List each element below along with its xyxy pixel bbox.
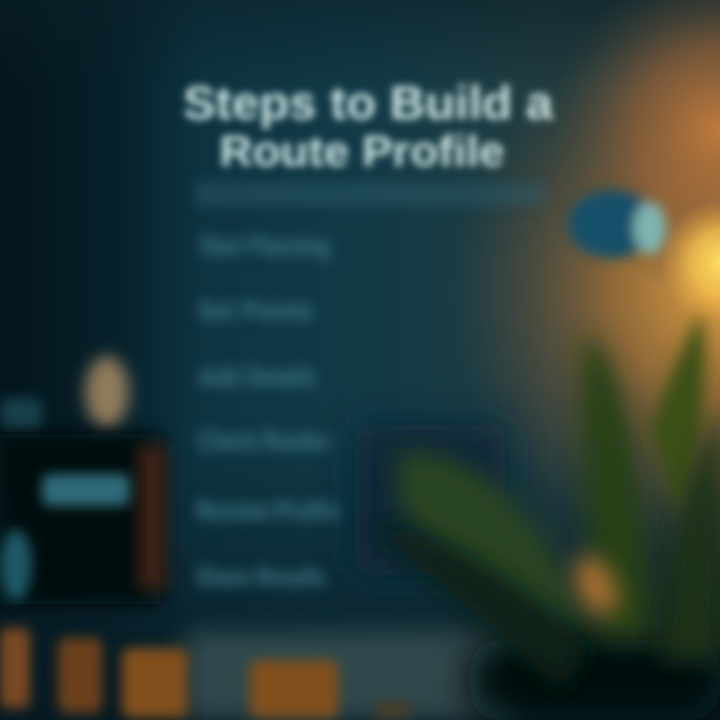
list text block: Review Profile [196,495,341,526]
round wall icon [568,190,666,258]
title: Steps to Build a [183,76,554,129]
list text block: Start Planning [200,230,330,261]
warm highlight [566,549,626,623]
bottom row of brown bottles [0,628,411,718]
title [183,76,554,176]
warm light glow [400,0,720,600]
left shelf with candle and jar [0,356,166,604]
list text block: Add Details [198,361,316,392]
upper left object [0,398,42,428]
dark panel behind plant [355,425,505,575]
list text block [195,182,545,592]
dark jar [0,434,160,604]
candle flame [85,356,129,428]
plant dark base [470,640,720,720]
jar label [42,474,130,506]
list text block: Share Results [196,561,326,592]
list text block: Check Routes [198,425,330,456]
list text block: Set Points [198,295,313,326]
tall leaves [582,335,655,640]
left leaves [395,452,600,640]
plant [370,312,720,720]
left small object [0,529,32,601]
title: Route Profile [220,127,504,176]
bottom shelf surface [185,632,515,720]
